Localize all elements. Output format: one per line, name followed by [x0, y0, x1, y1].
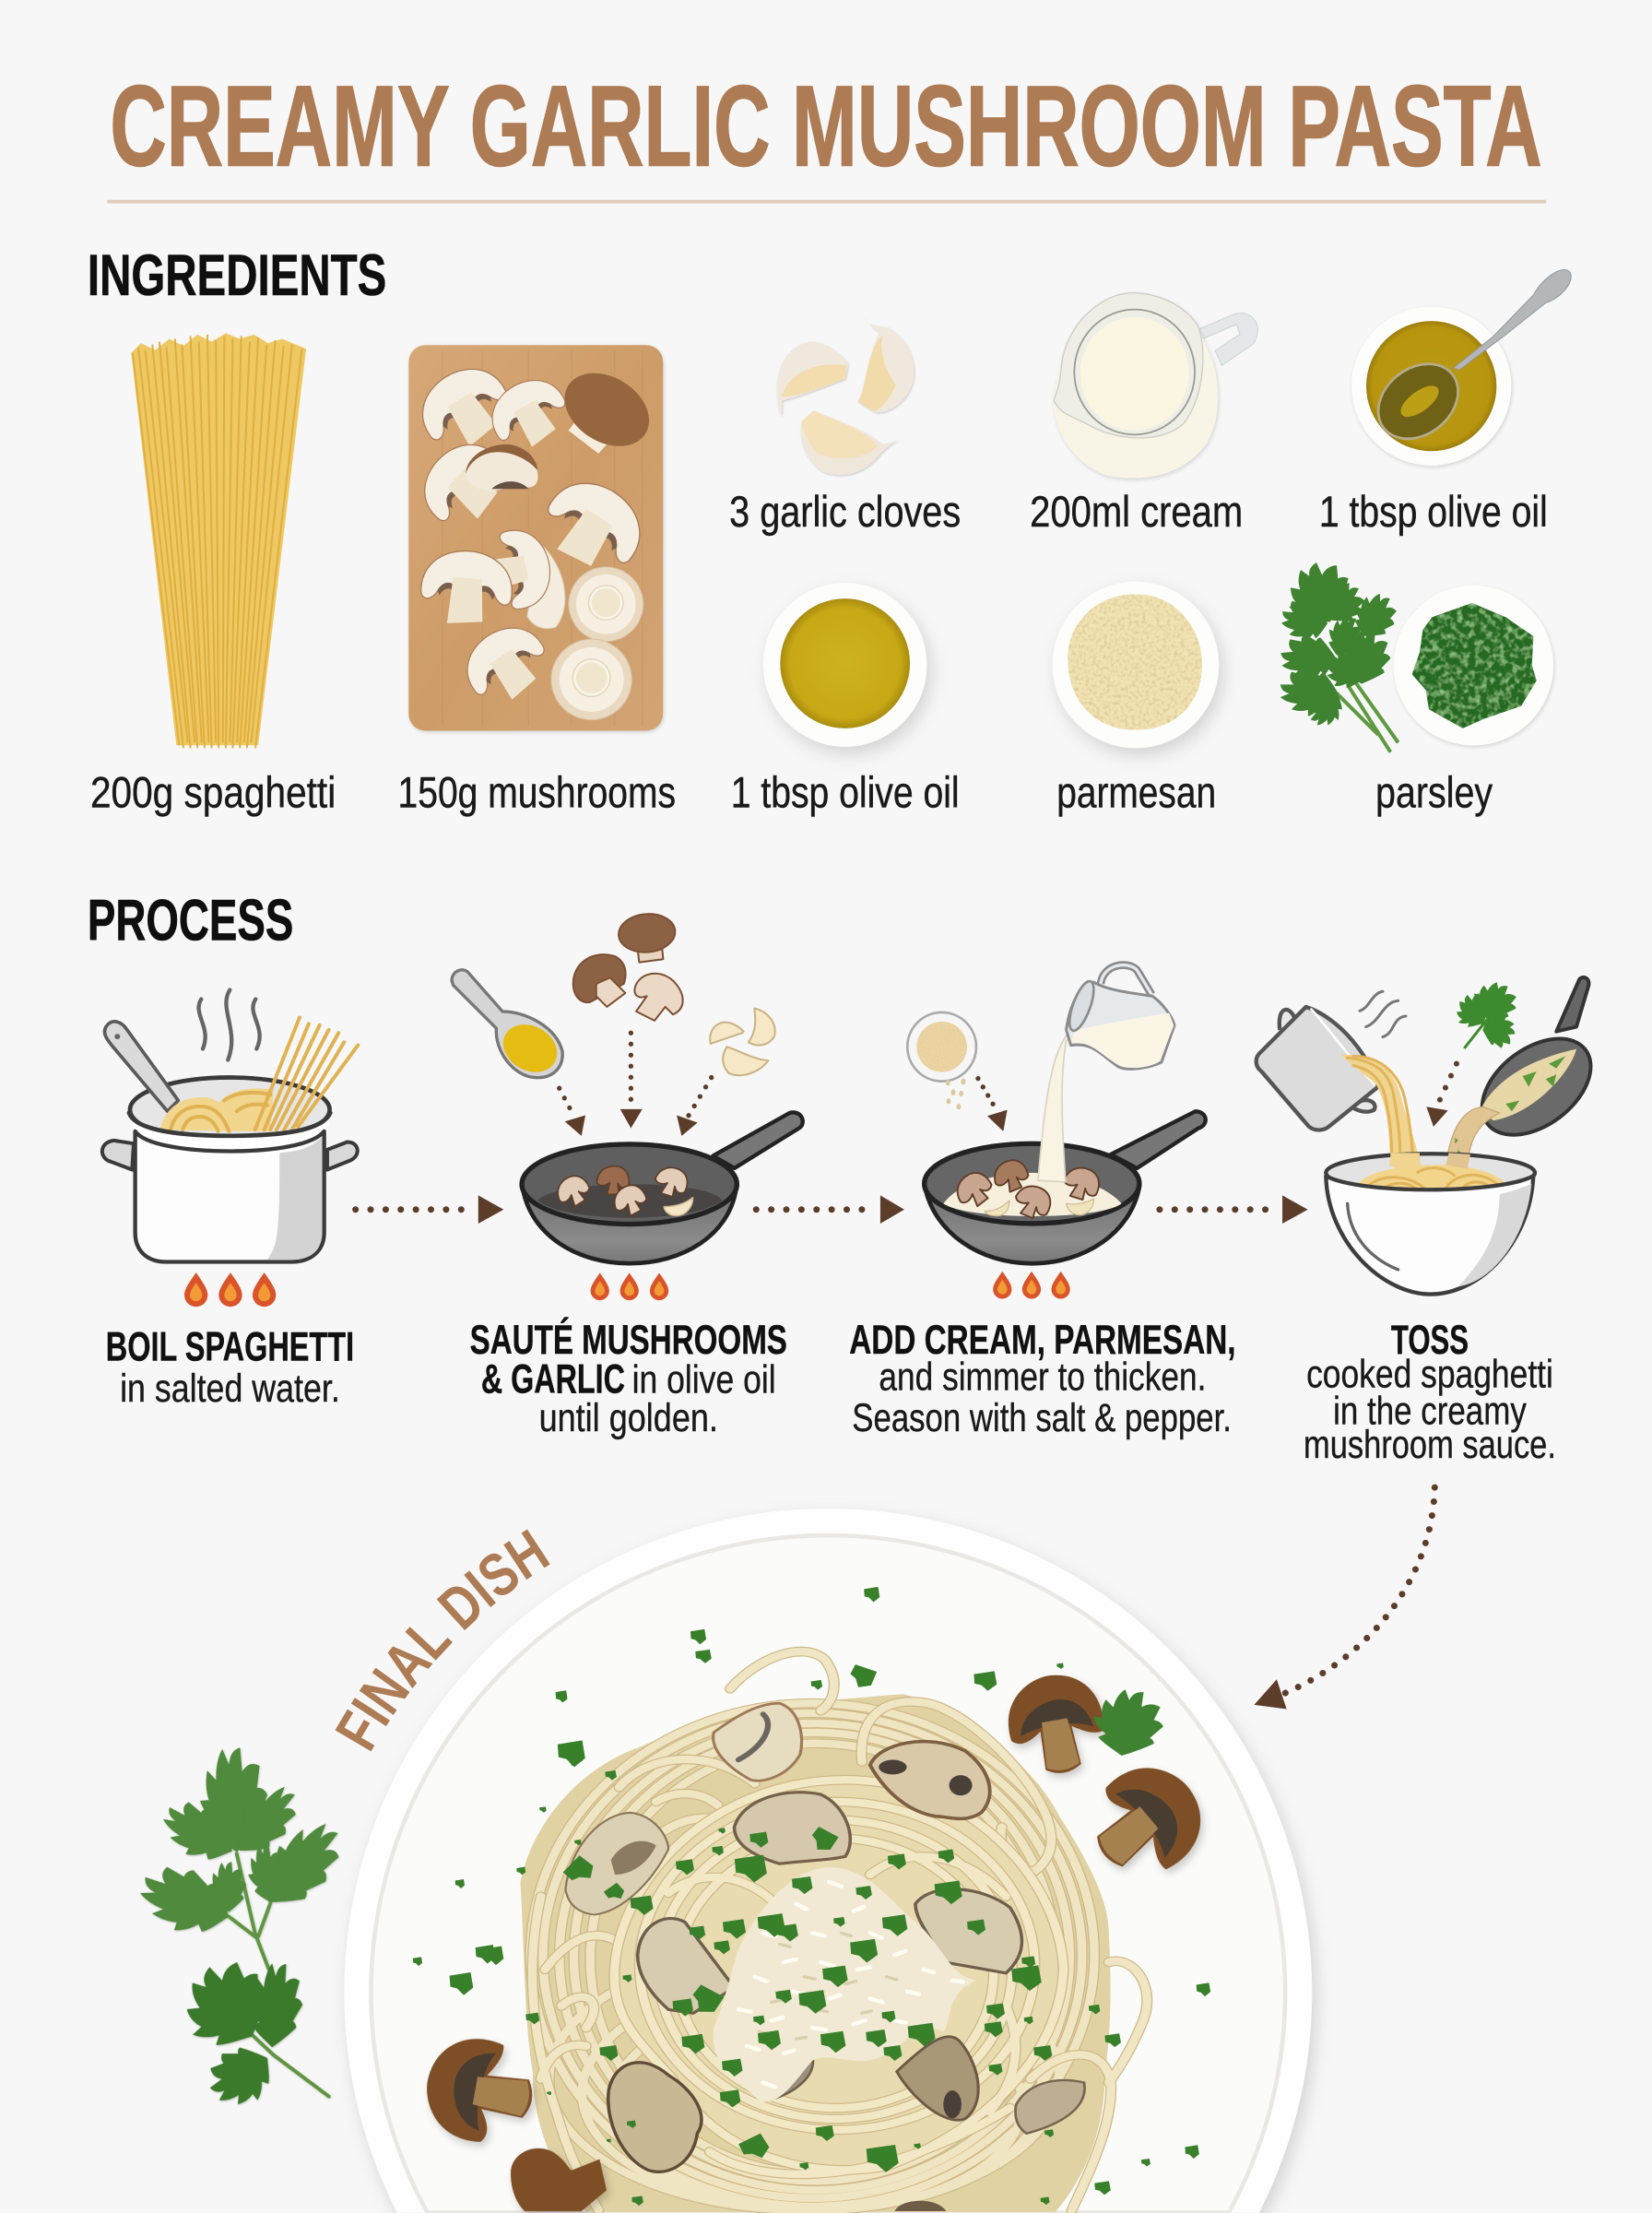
step 3 caption: and simmer to thicken.	[879, 1355, 1206, 1400]
step 4 illustration: tossing in bowl	[1257, 976, 1609, 1295]
pasta	[516, 1650, 1150, 2212]
parsley flecks	[516, 1650, 1150, 2206]
label: spaghetti: 200g spaghetti	[90, 769, 336, 818]
step 2 illustration: sauté pan with ingredients	[452, 912, 803, 1300]
step 2 caption	[470, 1317, 787, 1440]
step 4 caption: cooked spaghetti	[1306, 1353, 1553, 1397]
step 4 caption	[1304, 1318, 1556, 1467]
mushrooms in pasta	[566, 1703, 1085, 2211]
label: parsley: parsley	[1375, 769, 1493, 818]
path for curved label	[370, 1561, 556, 1754]
panel: ingredients	[90, 269, 1571, 818]
panel: final dish	[140, 1521, 1322, 2213]
parsley leaf on plate	[1089, 1686, 1168, 1761]
browned mushrooms on plate	[419, 1668, 1221, 2211]
step 1 caption	[106, 1324, 354, 1411]
icon: olive oil with spoon	[1351, 269, 1571, 466]
icon: tilted pan	[1446, 977, 1609, 1168]
label: olive oil 2: 1 tbsp olive oil	[731, 769, 960, 818]
icon: parsley	[1448, 976, 1522, 1049]
icon: falling mushrooms	[573, 912, 683, 1021]
step 1 caption: BOIL SPAGHETTI	[106, 1324, 354, 1369]
arrow: process to final dish	[1254, 1487, 1434, 1709]
step 4 caption: in the creamy	[1333, 1389, 1527, 1433]
icon: spoon of oil	[452, 970, 566, 1082]
arrow: step 1 to 2	[356, 1195, 503, 1224]
heading: process: PROCESS	[88, 888, 293, 953]
step 2 caption: until golden.	[539, 1396, 718, 1440]
step 4 caption: TOSS	[1391, 1318, 1469, 1363]
step 4 caption: mushroom sauce.	[1304, 1423, 1556, 1467]
icon: mushrooms on cutting board	[408, 345, 663, 731]
icon: mixing bowl	[1326, 1153, 1535, 1295]
icon: parmesan dish	[907, 1012, 976, 1107]
scattered flecks on plate	[413, 1587, 1210, 2159]
arrow: parmesan into pan	[978, 1079, 1008, 1131]
arrows: ingredients into pan	[560, 1033, 712, 1136]
icon: tilted pot	[1257, 1007, 1378, 1130]
flames: step 2	[591, 1273, 668, 1300]
flames: step 1	[184, 1272, 276, 1307]
icon: garlic cloves	[777, 318, 914, 475]
label: garlic: 3 garlic cloves	[729, 488, 961, 537]
step 3 caption: Season with salt & pepper.	[852, 1396, 1232, 1440]
label: mushrooms: 150g mushrooms	[398, 769, 676, 818]
grated parmesan	[714, 1867, 977, 2101]
step 1 caption: in salted water.	[120, 1367, 340, 1411]
icon: cream jug	[1054, 293, 1257, 479]
icon: falling garlic	[710, 1009, 775, 1075]
label: cream: 200ml cream	[1030, 488, 1243, 537]
icon: steam	[1360, 991, 1406, 1037]
icon: spaghetti bundle	[131, 333, 306, 748]
spaghetti stream	[1341, 1055, 1420, 1166]
arrow: step 3 to 4	[1160, 1195, 1308, 1224]
step 3 caption: ADD CREAM, PARMESAN,	[849, 1318, 1236, 1363]
arrow: step 2 to 3	[756, 1195, 904, 1224]
step 3 illustration: cream and parmesan	[907, 965, 1206, 1299]
step 2 caption: in olive oil	[632, 1358, 776, 1402]
step 2 caption: & GARLIC	[481, 1357, 625, 1402]
icon: parsley sprig and chopped parsley	[1278, 552, 1553, 752]
panel: process	[102, 912, 1609, 1467]
step 3 caption	[849, 1318, 1236, 1440]
label: final dish: FINAL DISH	[336, 1529, 550, 1752]
heading: ingredients: INGREDIENTS	[88, 243, 386, 308]
step 2 caption: SAUTÉ MUSHROOMS	[470, 1317, 787, 1363]
step 1 illustration: boiling pot	[102, 990, 358, 1307]
flames: step 3	[993, 1272, 1070, 1299]
icon: bowl of parmesan	[1053, 582, 1219, 748]
label: parmesan: parmesan	[1056, 769, 1216, 818]
plate	[344, 1509, 1312, 2213]
arrow: parsley into bowl	[1426, 1064, 1457, 1127]
icon: bowl of olive oil	[763, 583, 926, 747]
parsley sprig beside plate	[133, 1746, 354, 2119]
label: olive oil: 1 tbsp olive oil	[1319, 488, 1548, 537]
icon: pouring jug	[1065, 965, 1174, 1069]
